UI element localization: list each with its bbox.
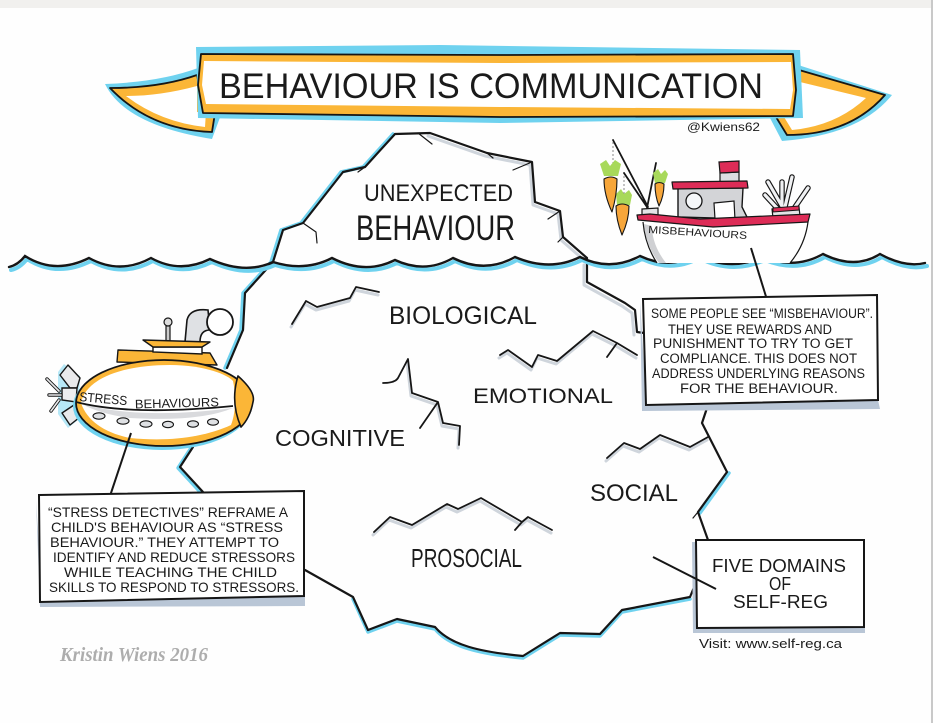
callout: five domains of self-reg: OF [769,574,791,594]
callout: misbehaviour: PUNISHMENT TO TRY TO GET [653,336,853,351]
funnel [719,161,739,182]
hull deck line [76,402,233,419]
callout: misbehaviour [640,295,880,411]
submarine label: STRESS [79,389,128,408]
heading: unexpected behaviour: UNEXPECTED [364,180,513,207]
crane and poles [613,140,656,208]
label: biological: BIOLOGICAL [389,302,537,330]
callout: five domains of self-reg [692,540,865,633]
submarine label [79,389,219,411]
submarine [47,309,253,450]
callout: misbehaviour: COMPLIANCE. THIS DOES NOT [660,351,857,366]
nose cone [235,376,253,427]
callout: stress detectives: IDENTIFY AND REDUCE STRESSORS [53,549,295,565]
heading: unexpected behaviour [356,180,515,248]
pointer: submarine to text box [108,433,131,502]
conning tower [117,340,217,365]
banner right tail [770,64,892,141]
submarine label: BEHAVIOURS [135,395,219,411]
periscope [185,309,233,342]
heading: unexpected behaviour: BEHAVIOUR [356,209,515,248]
propeller [47,364,80,428]
callout: five domains of self-reg: SELF-REG [733,592,828,612]
waterline waves [9,254,927,271]
label: emotional: EMOTIONAL [473,385,613,408]
antenna [164,318,172,342]
hull [73,362,251,450]
label: prosocial: PROSOCIAL [411,543,522,573]
credit handle: @Kwiens62 [687,120,760,134]
portholes [93,413,218,428]
callout: stress detectives: “STRESS DETECTIVES” REFRAME A [48,504,289,520]
callout: stress detectives: SKILLS TO RESPOND TO STRESSORS. [49,579,299,595]
pointer: boat to text box [751,248,768,303]
callout: five domains of self-reg: FIVE DOMAINS [712,556,846,576]
pointer: domains to iceberg [653,557,716,589]
callout: stress detectives [36,491,305,607]
domain crack lines [291,287,708,535]
banner body [196,45,803,123]
carrots [600,142,668,235]
artist signature: Kristin Wiens 2016 [59,644,208,666]
crane base [642,208,658,216]
callout: misbehaviour: SOME PEOPLE SEE “MISBEHAVIOUR”. [651,306,873,321]
banner [105,45,892,141]
label: cognitive: COGNITIVE [275,425,405,451]
callout: stress detectives: CHILD'S BEHAVIOUR AS “STRESS [51,519,283,535]
callout: misbehaviour: ADDRESS UNDERLYING REASONS [652,366,865,381]
callout: misbehaviour: THEY USE REWARDS AND [668,322,832,337]
cabin [678,188,748,220]
boat label: MISBEHAVIOURS [648,224,747,242]
hull [643,222,808,263]
callout: stress detectives: BEHAVIOUR.” THEY ATTEMPT TO [50,534,279,550]
cabin roof [672,181,748,189]
deck band [637,214,810,227]
website link text: Visit: www.self-reg.ca [699,636,843,651]
iceberg [178,133,729,658]
label: social: SOCIAL [590,480,678,507]
callout: misbehaviour: FOR THE BEHAVIOUR. [680,381,838,396]
banner left tail [105,68,222,139]
bucket and spades [765,177,808,218]
title: BEHAVIOUR IS COMMUNICATION [219,67,763,106]
boat [600,140,810,263]
callout: stress detectives: WHILE TEACHING THE CHILD [64,564,277,580]
